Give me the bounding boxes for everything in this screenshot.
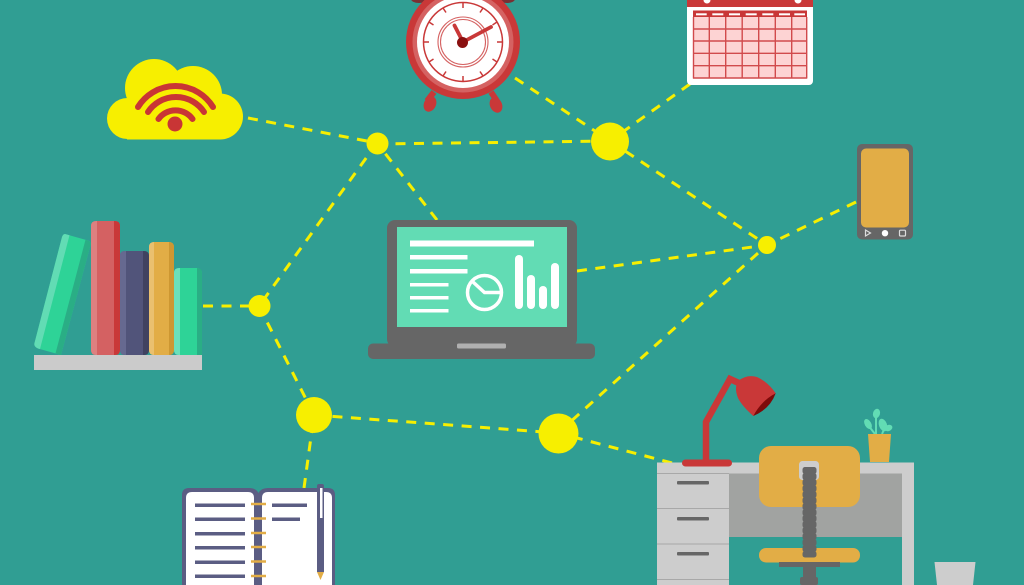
chair spine xyxy=(802,467,816,558)
network nodes xyxy=(248,122,776,454)
icon: desk with drawers xyxy=(657,462,914,585)
icon: calendar xyxy=(687,0,813,85)
icon: smartphone xyxy=(857,144,913,240)
red book xyxy=(91,221,120,355)
icon: desk lamp xyxy=(682,376,776,466)
icon: waste bin xyxy=(934,562,976,585)
icon: alarm clock xyxy=(406,0,520,115)
green book xyxy=(174,268,202,355)
icon: office chair xyxy=(759,446,860,585)
pie chart xyxy=(468,276,502,310)
navy book xyxy=(120,251,149,355)
pen xyxy=(317,484,324,580)
bar chart xyxy=(515,255,559,309)
icon: open notebook with pen xyxy=(182,484,335,585)
icon: wifi cloud xyxy=(107,59,243,140)
orange book xyxy=(149,242,174,355)
tilted green book xyxy=(34,234,91,355)
text lines xyxy=(410,240,534,312)
icon: books on shelf xyxy=(34,221,202,370)
dashed network connections xyxy=(203,78,856,488)
icon: potted plant xyxy=(862,408,893,462)
icon: laptop with dashboard xyxy=(368,220,595,359)
